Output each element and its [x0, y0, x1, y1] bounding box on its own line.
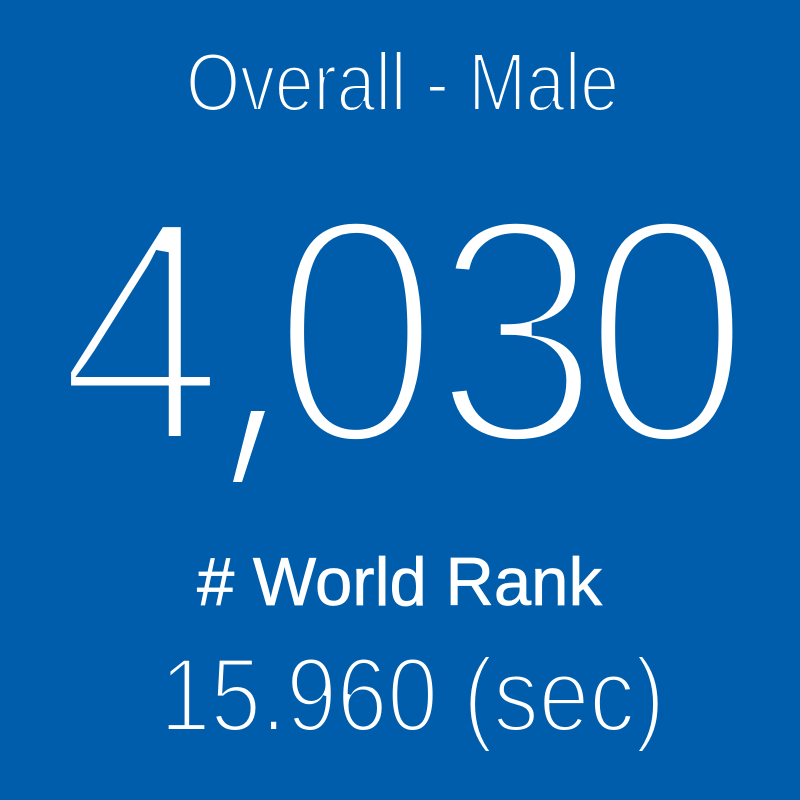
main number: 4,030 — [58, 151, 751, 512]
time value: 15.960 (sec) — [160, 637, 665, 754]
icon: slanted comma — [233, 411, 265, 482]
metric label: # World Rank — [197, 544, 603, 620]
title: Overall - Male — [186, 36, 619, 128]
